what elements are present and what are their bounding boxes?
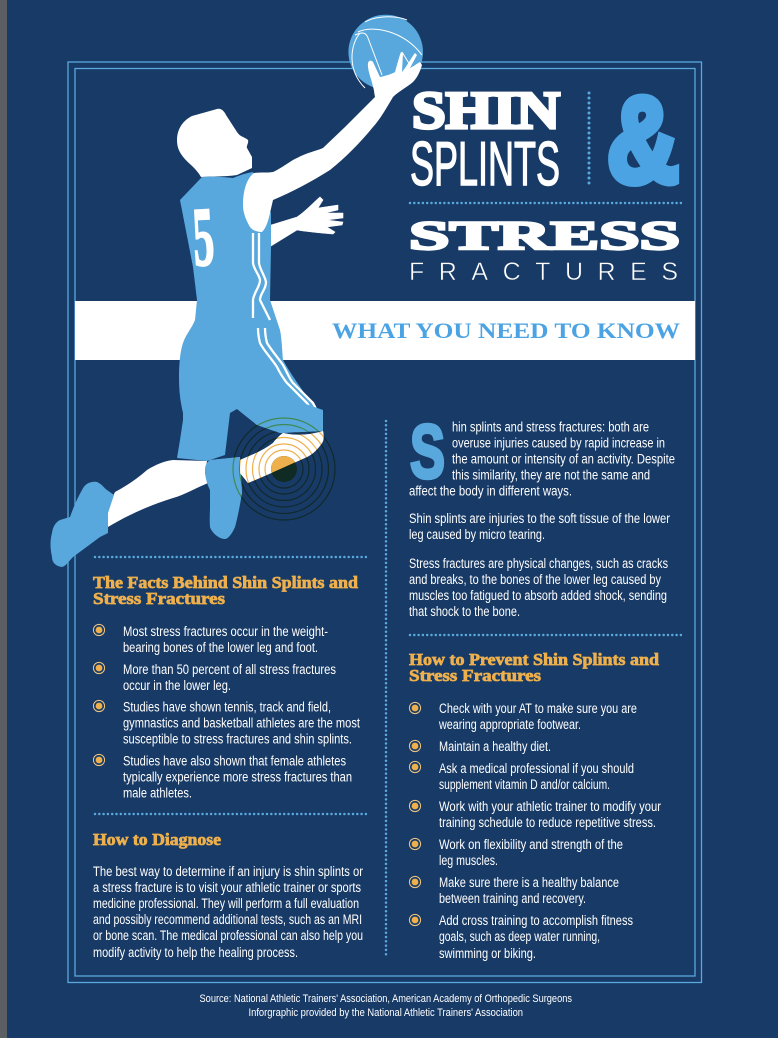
diagnose paragraph: or bone scan. The medical professional can also help you xyxy=(93,928,363,943)
intro paragraphs xyxy=(409,420,675,619)
illustration: basketball player xyxy=(50,15,423,567)
intro paragraphs: leg caused by micro tearing. xyxy=(409,527,545,542)
facts list: gymnastics and basketball athletes are the most xyxy=(123,716,360,730)
prevent list: Work with your athletic trainer to modify your xyxy=(439,799,661,814)
lower shin xyxy=(240,431,324,483)
title: shin: SHIN xyxy=(412,82,560,140)
prevent list: supplement vitamin D and/or calcium. xyxy=(439,777,610,792)
intro paragraphs: muscles too fatigued to absorb added shock, sending xyxy=(409,588,667,603)
facts list: male athletes. xyxy=(123,786,192,800)
panel: introduction xyxy=(409,410,675,619)
prevent list xyxy=(438,701,661,961)
drop cap: S xyxy=(410,410,445,495)
facts list: Studies have also shown that female athletes xyxy=(123,754,346,768)
heading: how to prevent: Stress Fractures xyxy=(409,666,542,685)
intro paragraphs: that shock to the bone. xyxy=(409,604,520,619)
prevent list: Work on flexibility and strength of the xyxy=(439,837,623,852)
facts list: Most stress fractures occur in the weight- xyxy=(123,624,328,639)
prevent list: Ask a medical professional if you should xyxy=(439,761,634,776)
prevent bullet icons xyxy=(409,702,421,926)
icon: basketball xyxy=(348,15,423,89)
diagnose paragraph: a stress fracture is to visit your athletic trainer or sports xyxy=(93,880,361,895)
white banner xyxy=(75,301,695,360)
heading: how to diagnose: How to Diagnose xyxy=(93,830,221,849)
intro paragraphs: Shin splints are injuries to the soft tissue of the lower xyxy=(409,511,670,526)
diagnose paragraph: The best way to determine if an injury is shin splints or xyxy=(93,864,363,879)
heading: the facts: The Facts Behind Shin Splints and xyxy=(93,573,358,592)
prevent list: swimming or biking. xyxy=(439,946,536,961)
prevent list: wearing appropriate footwear. xyxy=(438,717,581,732)
raised arm and hand xyxy=(243,52,422,232)
heading: how to prevent xyxy=(409,650,659,685)
prevent list: leg muscles. xyxy=(439,853,498,868)
diagnose paragraph: medicine professional. They will perform a full evaluation xyxy=(93,896,359,911)
source footer xyxy=(200,993,572,1019)
source footer: Source: National Athletic Trainers' Association, American Academy of Orthopedic Surgeons xyxy=(200,993,572,1005)
facts list xyxy=(123,624,360,800)
heading: the facts xyxy=(93,573,358,608)
title: stress: STRESS xyxy=(409,213,680,258)
prevent list: Add cross training to accomplish fitness xyxy=(439,913,633,928)
back hand and forearm xyxy=(271,197,343,246)
intro paragraphs: the amount or intensity of an activity. Despite xyxy=(452,452,675,466)
source footer: Inforgraphic provided by the National Athletic Trainers' Association xyxy=(248,1007,523,1019)
intro paragraphs: hin splints and stress fractures: both are xyxy=(452,420,649,434)
facts bullet icons xyxy=(93,624,105,766)
intro paragraphs: Stress fractures are physical changes, such as cracks xyxy=(409,556,668,571)
prevent list: Make sure there is a healthy balance xyxy=(439,875,619,890)
head xyxy=(177,109,252,177)
facts list: More than 50 percent of all stress fractures xyxy=(123,662,336,677)
title xyxy=(409,72,680,286)
prevent list: goals, such as deep water running, xyxy=(439,929,600,944)
title: ampersand: & xyxy=(607,72,679,208)
facts list: typically experience more stress fractures than xyxy=(123,770,352,784)
left page edge xyxy=(0,0,7,1038)
panel: how to diagnose xyxy=(93,830,363,960)
prevent list: between training and recovery. xyxy=(439,891,586,906)
front shoe xyxy=(50,482,114,567)
facts list: Studies have shown tennis, track and field, xyxy=(123,700,331,714)
rear foot xyxy=(205,457,242,539)
intro paragraphs: this similarity, they are not the same and xyxy=(452,468,650,482)
jersey number: 5 xyxy=(190,190,216,284)
facts list: bearing bones of the lower leg and foot. xyxy=(123,640,318,655)
intro paragraphs: overuse injuries caused by rapid increase in xyxy=(452,436,665,450)
double frame xyxy=(68,62,702,982)
intro paragraphs: affect the body in different ways. xyxy=(409,484,572,498)
facts list: occur in the lower leg. xyxy=(123,678,231,693)
diagnose paragraph: modify activity to help the healing process. xyxy=(93,945,298,960)
jersey and shorts xyxy=(177,172,323,461)
injury target rings xyxy=(210,404,336,528)
jersey and shorts stripes xyxy=(253,233,318,430)
prevent list: training schedule to reduce repetitive stress. xyxy=(439,815,656,830)
prevent list: Maintain a healthy diet. xyxy=(439,739,551,754)
subtitle banner text: WHAT YOU NEED TO KNOW xyxy=(332,318,680,343)
facts list: susceptible to stress fractures and shin splints. xyxy=(123,732,352,746)
diagnose paragraph: and possibly recommend additional tests, such as an MRI xyxy=(93,912,362,927)
prevent list: Check with your AT to make sure you are xyxy=(439,701,637,716)
heading: how to prevent: How to Prevent Shin Splints and xyxy=(409,650,659,669)
front leg xyxy=(108,460,208,527)
title: splints: SPLINTS xyxy=(410,130,560,199)
panel: how to prevent xyxy=(409,650,661,961)
diagnose paragraph xyxy=(93,864,363,960)
heading: the facts: Stress Fractures xyxy=(93,589,226,608)
title: fractures: FRACTURES xyxy=(409,258,678,286)
panel: the facts xyxy=(93,573,360,800)
intro paragraphs: and breaks, to the bones of the lower leg caused by xyxy=(409,572,661,587)
